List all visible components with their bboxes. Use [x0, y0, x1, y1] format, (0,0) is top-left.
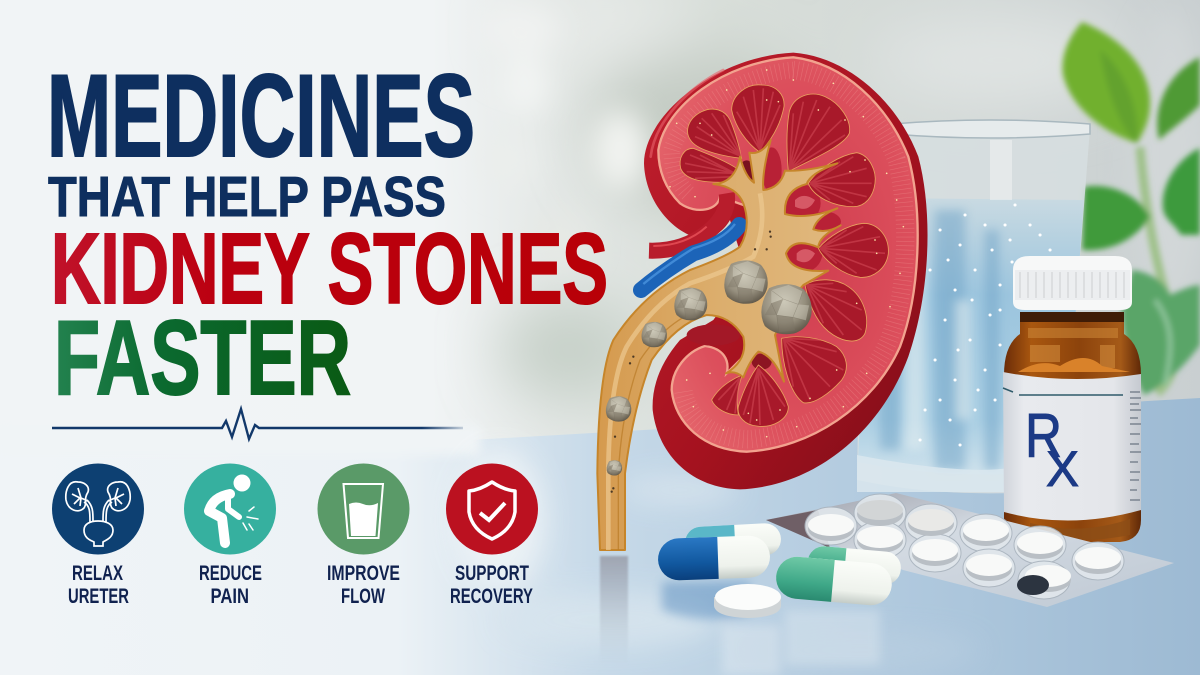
label: SUPPORT — [455, 562, 529, 585]
benefit: support recovery — [446, 464, 538, 608]
renal artery — [649, 193, 727, 251]
renal vein — [641, 225, 739, 290]
benefit: reduce pain — [184, 464, 276, 608]
title line: kidney stones: KIDNEY STONES — [51, 213, 608, 325]
water glass — [857, 120, 1090, 493]
title — [47, 50, 608, 417]
title line: medicines: MEDICINES — [47, 50, 475, 181]
glass rim — [892, 120, 1090, 138]
cortex glitter — [670, 70, 903, 437]
label: RECOVERY — [450, 585, 533, 608]
blue capsule — [657, 535, 771, 581]
plant leaves — [1062, 22, 1200, 395]
ureter highlight — [608, 193, 762, 550]
glass body — [857, 128, 1090, 493]
kidney stones — [606, 260, 812, 476]
icon: shield with check — [446, 464, 538, 554]
bubbles — [905, 205, 1050, 445]
tablet wells — [805, 494, 1124, 599]
icon: person in pain — [184, 464, 276, 554]
tablets — [808, 500, 1121, 587]
title line: that help pass: THAT HELP PASS — [48, 165, 446, 229]
benefit: relax ureter — [52, 464, 144, 608]
label: URETER — [68, 585, 129, 608]
upper lobe highlight — [651, 70, 723, 157]
cut cortex surface — [658, 57, 918, 452]
label — [450, 562, 533, 608]
capsule reflections — [662, 582, 880, 675]
kidney cross-section — [597, 53, 928, 550]
foil sheet — [766, 493, 1174, 607]
tablet sides — [808, 502, 1121, 592]
label: FLOW — [341, 585, 385, 608]
white label — [1003, 372, 1141, 521]
Rx mark: R — [1025, 402, 1062, 471]
label — [327, 562, 400, 608]
bottle cap — [1013, 256, 1132, 310]
rear green capsule — [806, 545, 902, 586]
renal pelvis and ureter — [597, 140, 841, 550]
renal pyramids — [680, 85, 888, 426]
Rx mark: X — [1046, 441, 1079, 497]
green capsule — [774, 555, 894, 607]
dark tablet — [1017, 575, 1049, 595]
label: REDUCE — [199, 562, 262, 585]
heartbeat divider — [52, 409, 463, 439]
white tablet — [714, 584, 781, 618]
capsules and tablet — [657, 523, 902, 675]
rear teal capsule — [684, 523, 782, 559]
ureter reflection on table — [600, 556, 628, 666]
label: PAIN — [210, 585, 249, 608]
blister pack — [766, 493, 1174, 607]
kidney outer body — [644, 53, 928, 489]
label: RELAX — [72, 562, 123, 585]
cortex streaks — [683, 70, 905, 439]
title line: faster: FASTER — [54, 299, 351, 417]
icon: kidneys and bladder — [52, 464, 144, 554]
benefit: improve flow — [318, 464, 410, 608]
pyramid striations — [685, 88, 885, 425]
medicine bottle with Rx label — [1003, 256, 1141, 542]
label — [199, 562, 262, 608]
Rx mark — [1025, 402, 1079, 497]
label — [68, 562, 129, 608]
label: IMPROVE — [327, 562, 400, 585]
medullary pockets — [687, 147, 841, 370]
amber glass — [1004, 312, 1141, 542]
water — [858, 198, 1084, 474]
sediment specks — [612, 232, 771, 492]
tablets inside bottle — [1030, 519, 1130, 540]
icon: glass of water — [318, 464, 410, 554]
